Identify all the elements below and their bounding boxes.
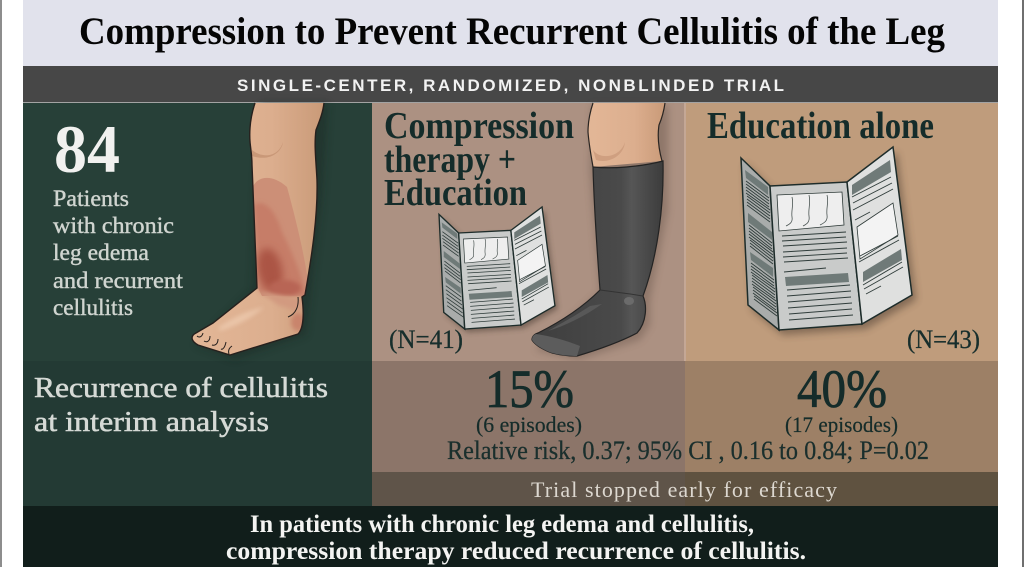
title banner: Compression to Prevent Recurrent Cellulitis of the Leg	[79, 10, 945, 53]
patient description: cellulitis	[53, 295, 133, 320]
patient description: and recurrent	[53, 268, 184, 293]
outcome label	[34, 372, 328, 438]
icon: large education brochure	[741, 147, 916, 335]
illustration: leg with compression stocking	[532, 103, 668, 360]
trial stopped band	[372, 472, 998, 506]
results row	[372, 359, 998, 472]
subtitle bar	[23, 66, 998, 102]
illustration: swollen leg with cellulitis	[192, 103, 328, 360]
subtitle bar: SINGLE-CENTER, RANDOMIZED, NONBLINDED TRIAL	[237, 76, 784, 95]
patient count: 84	[54, 111, 120, 187]
sample size N=43: (N=43)	[907, 325, 980, 354]
result: education 40%	[785, 359, 898, 437]
conclusion banner: In patients with chronic leg edema and cellulitis,	[250, 511, 754, 538]
result: education 40%: (17 episodes)	[785, 412, 898, 437]
education heading: Education alone	[707, 105, 934, 147]
result: compression 15%	[476, 359, 582, 437]
panel: compression therapy arm	[372, 103, 685, 361]
compression heading: Compression	[384, 105, 574, 147]
outcome label: at interim analysis	[34, 406, 269, 438]
trial stopped band: Trial stopped early for efficacy	[531, 477, 837, 502]
compression heading: therapy +	[384, 139, 516, 181]
panel: patients	[23, 103, 372, 506]
patient description	[53, 186, 184, 320]
outcome label: Recurrence of cellulitis	[34, 372, 328, 404]
patient description: with chronic	[53, 213, 174, 238]
patient description: Patients	[53, 186, 129, 211]
sample size N=41: (N=41)	[389, 325, 463, 354]
patient description: leg edema	[53, 240, 149, 265]
title banner	[23, 0, 998, 66]
compression heading	[384, 105, 574, 214]
relative risk statistics: Relative risk, 0.37; 95% CI , 0.16 to 0.84; P=0.02	[447, 436, 929, 465]
result: compression 15%: (6 episodes)	[476, 412, 582, 437]
result: compression 15%: 15%	[485, 359, 574, 419]
icon: small education brochure	[439, 207, 558, 332]
conclusion banner: compression therapy reduced recurrence of cellulitis.	[226, 538, 806, 565]
compression heading: Education	[384, 172, 527, 214]
panel: education alone arm	[684, 103, 998, 361]
result: education 40%: 40%	[797, 359, 887, 419]
conclusion banner	[23, 506, 998, 567]
